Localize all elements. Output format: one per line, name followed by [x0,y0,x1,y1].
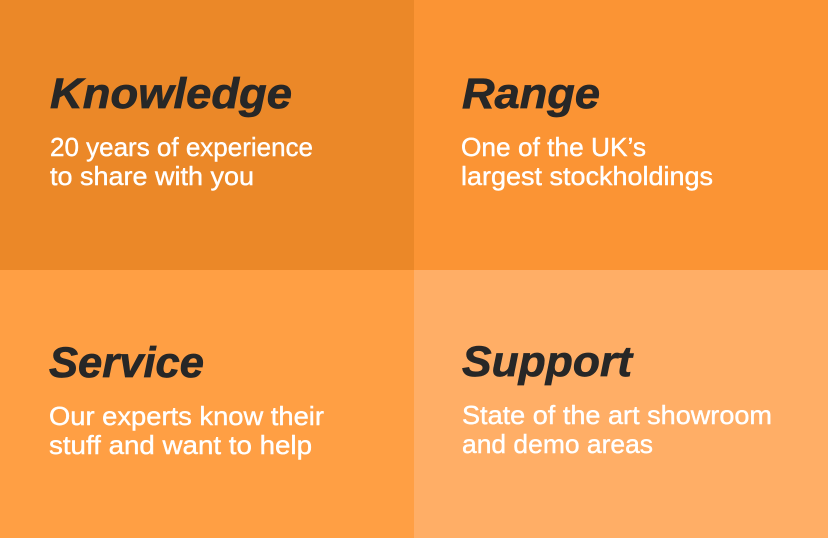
heading: knowledge: Knowledge [50,70,292,118]
text: support description: State of the art showroom [462,400,772,430]
text: service description [49,401,324,460]
text: knowledge description: to share with you [50,161,254,191]
panel: service [0,270,414,538]
heading: support: Support [462,338,634,386]
text: service description: stuff and want to help [49,430,312,460]
panel: support [414,270,828,538]
text: range description: largest stockholdings [461,161,713,191]
text: range description [461,132,713,191]
heading: service: Service [49,339,204,387]
text: support description: and demo areas [462,429,653,459]
text: range description: One of the UK’s [461,132,646,162]
heading: range: Range [462,70,600,118]
panel: range [414,0,828,270]
text: knowledge description [50,132,313,191]
text: service description: Our experts know their [49,401,324,431]
text: support description [462,400,772,459]
text: knowledge description: 20 years of experience [50,132,313,162]
panel: knowledge [0,0,414,270]
